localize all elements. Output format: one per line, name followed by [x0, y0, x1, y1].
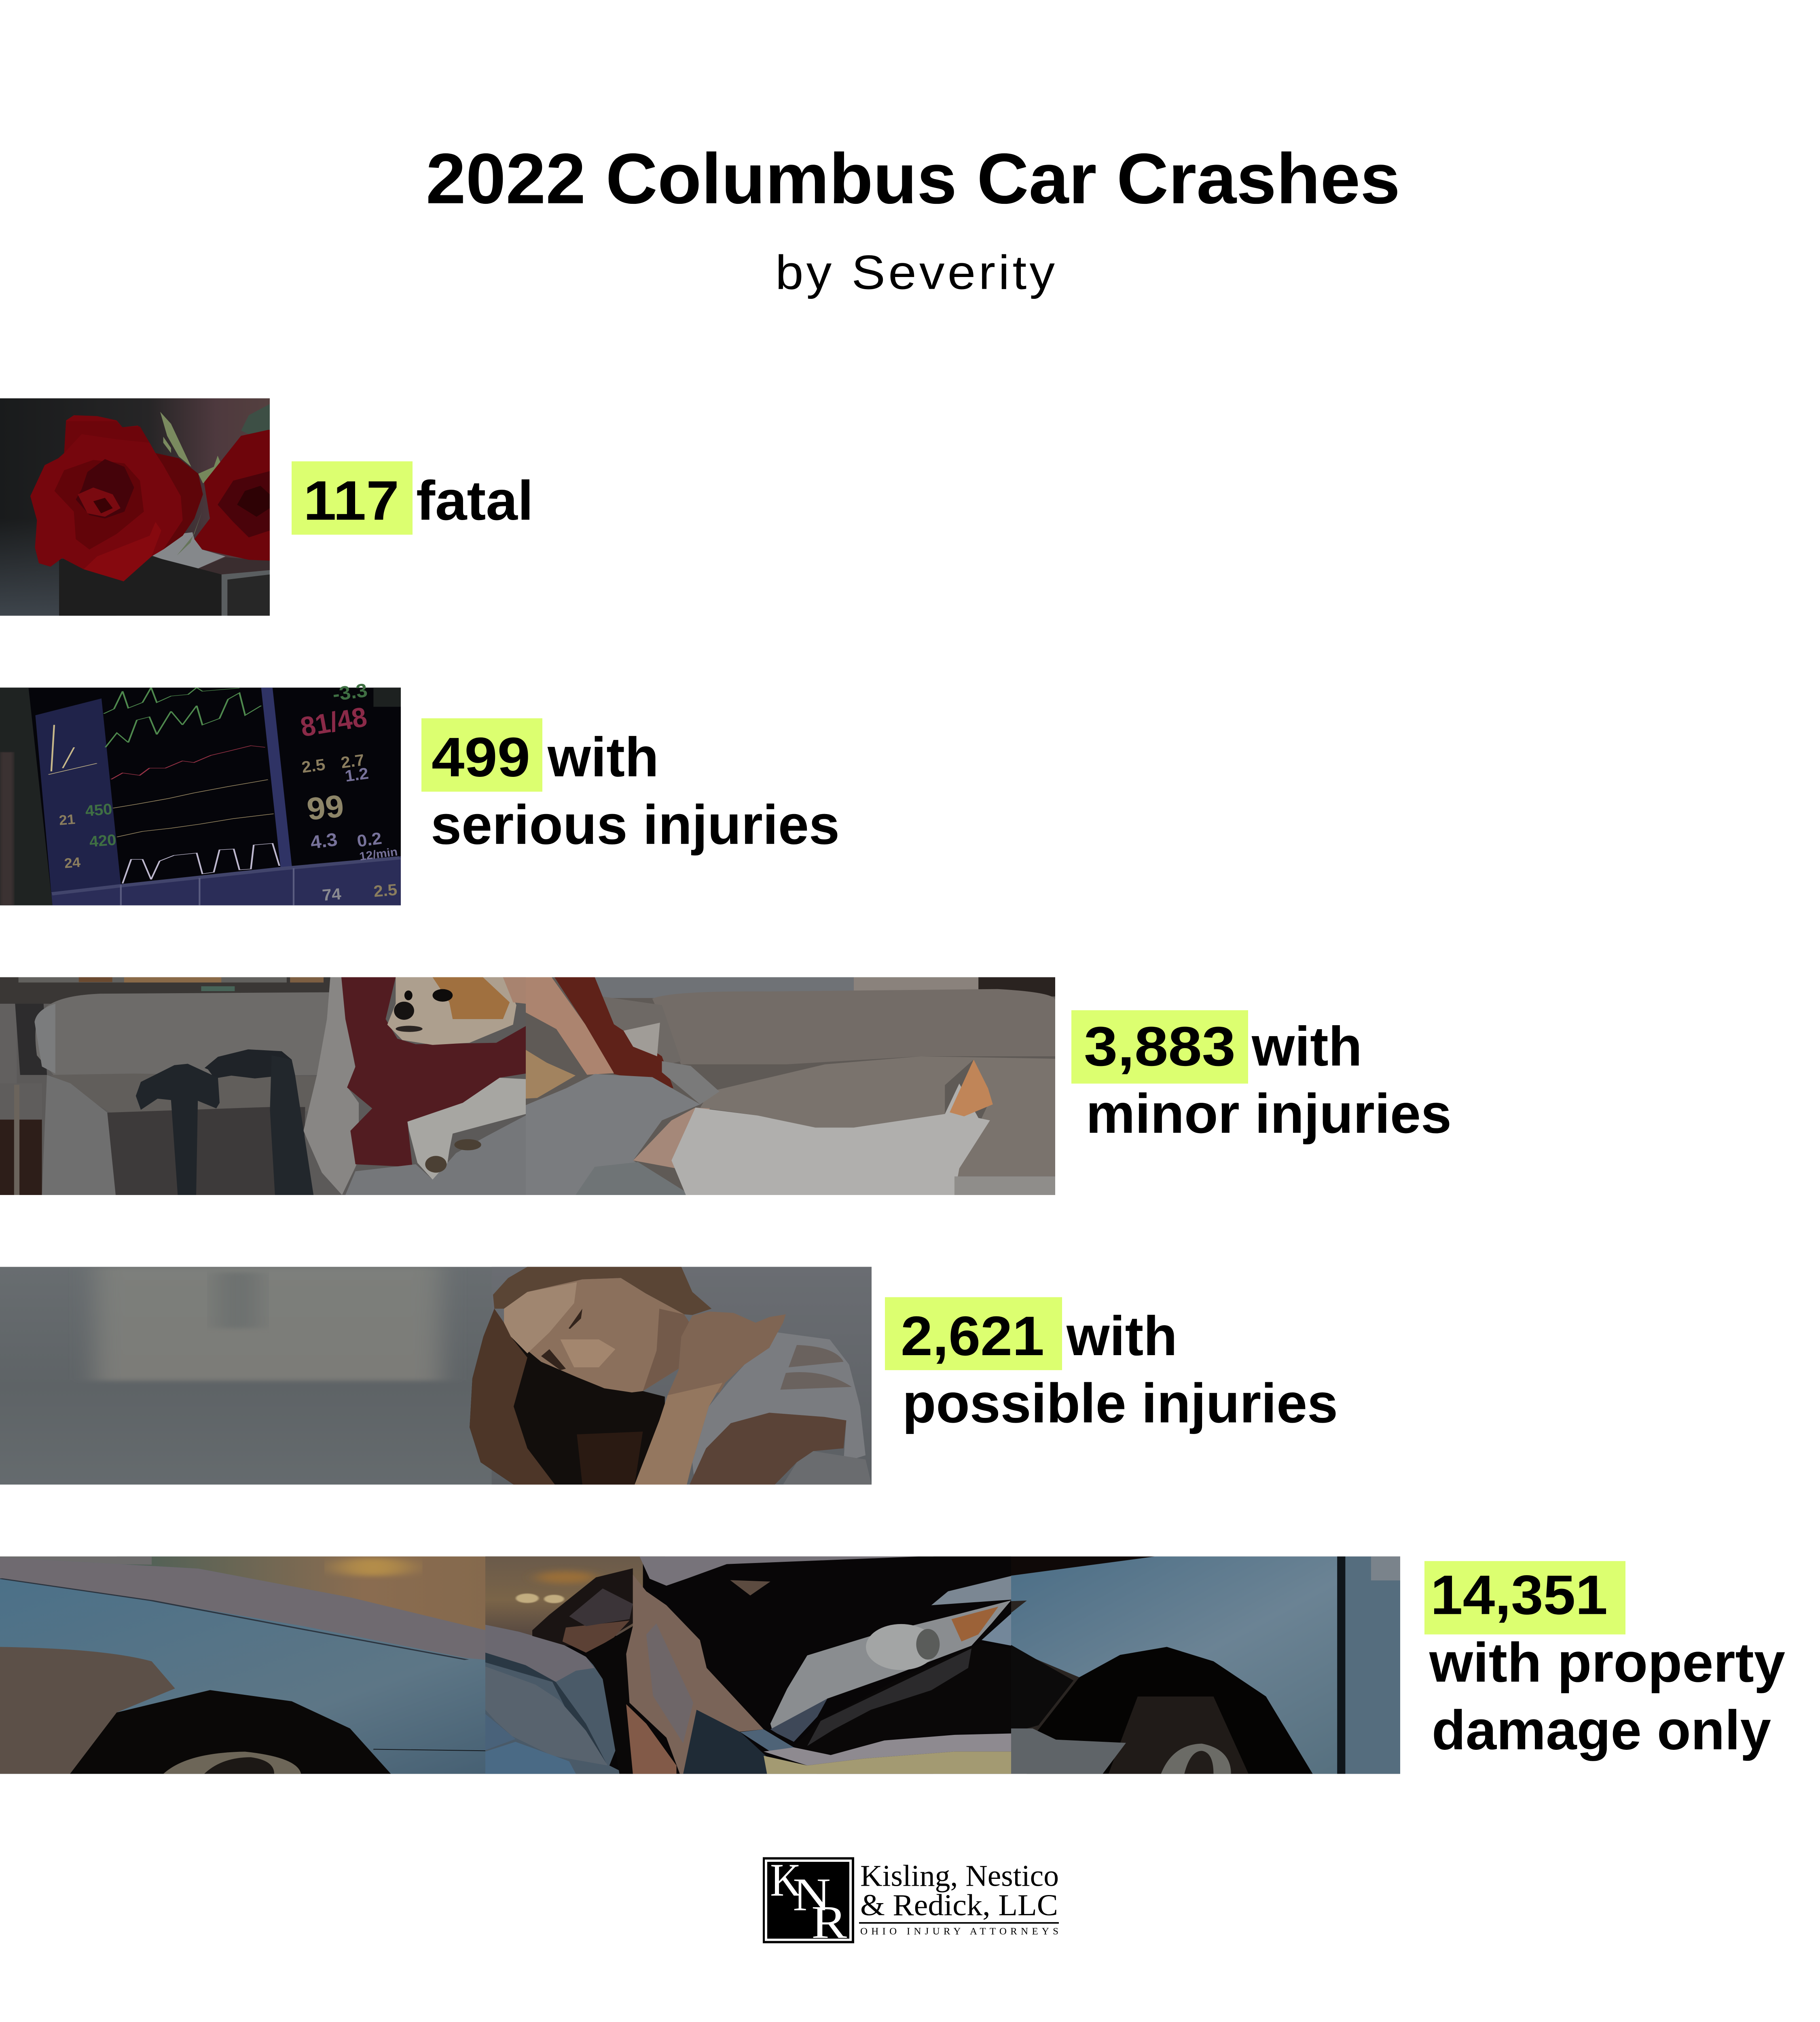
- photo: woman with leg cast, corgi and crutches on sofa: [0, 977, 1055, 1195]
- panel: possible injuries: [0, 1267, 1338, 1485]
- monitor readouts: 4.3: [309, 829, 339, 853]
- label: with: with: [547, 726, 659, 788]
- label: fatal: fatal: [416, 469, 533, 531]
- photo: two cars after a head-on collision: [0, 1557, 1400, 1774]
- panel: serious injuries: [0, 680, 840, 905]
- label: with property: with property: [1429, 1631, 1785, 1694]
- photo: red roses on a gravestone: [0, 398, 270, 616]
- monitor readouts: 2.5: [373, 880, 398, 901]
- photo: woman holding her neck in pain: [0, 1267, 872, 1485]
- monitor readouts: [58, 680, 398, 904]
- panel: fatal crashes: [0, 398, 533, 616]
- monitor readouts: 99: [305, 788, 346, 827]
- logo name line one: Kisling, Nestico: [860, 1859, 1059, 1893]
- logo monogram box: [763, 1854, 854, 1948]
- monitor readouts: 21: [58, 812, 76, 828]
- logo name line two: & Redick, LLC: [860, 1888, 1058, 1922]
- value: 2,621: 2,621: [901, 1305, 1044, 1367]
- logo tagline: OHIO INJURY ATTORNEYS: [860, 1926, 1058, 1937]
- value: 117: 117: [303, 469, 399, 531]
- label: minor injuries: minor injuries: [1086, 1082, 1452, 1144]
- monitor readouts: 12/min: [358, 846, 398, 863]
- monitor readouts: 0.2: [356, 829, 383, 851]
- monitor readouts: 450: [85, 801, 113, 820]
- monitor readouts: 420: [89, 831, 117, 850]
- label: damage only: damage only: [1432, 1699, 1771, 1761]
- value highlight: 2,621: [885, 1297, 1062, 1370]
- monitor readouts: 2.7: [340, 751, 366, 772]
- logo: Kisling, Nestico & Redick, LLC: [763, 1854, 1059, 1948]
- value highlight: 14,351: [1424, 1561, 1625, 1635]
- panel: property damage only: [0, 1557, 1785, 1774]
- monitor readouts: 24: [63, 854, 81, 871]
- label: with: with: [1066, 1305, 1177, 1367]
- logo monogram box: N: [793, 1868, 831, 1920]
- logo monogram box: K: [770, 1854, 801, 1906]
- monitor readouts: -3.3: [331, 680, 369, 705]
- monitor readouts: 1.2: [344, 764, 370, 785]
- photo: patient vital signs monitor: [0, 687, 401, 905]
- label: possible injuries: possible injuries: [902, 1372, 1338, 1434]
- logo monogram box: R: [811, 1896, 847, 1948]
- value: 14,351: 14,351: [1431, 1564, 1608, 1626]
- panel: minor injuries: [0, 977, 1452, 1195]
- value: 499: 499: [432, 726, 530, 788]
- monitor readouts: 2.5: [301, 755, 326, 776]
- value highlight: 499: [421, 718, 542, 792]
- value highlight: 117: [292, 461, 413, 535]
- value: 3,883: 3,883: [1084, 1015, 1236, 1077]
- monitor readouts: 74: [322, 885, 342, 904]
- label: with: with: [1251, 1015, 1362, 1077]
- label: serious injuries: serious injuries: [431, 793, 840, 856]
- monitor readouts: 81/48: [298, 701, 369, 742]
- title: 2022 Columbus Car Crashes: [426, 139, 1400, 218]
- value highlight: 3,883: [1071, 1010, 1248, 1084]
- subtitle: by Severity: [775, 245, 1055, 299]
